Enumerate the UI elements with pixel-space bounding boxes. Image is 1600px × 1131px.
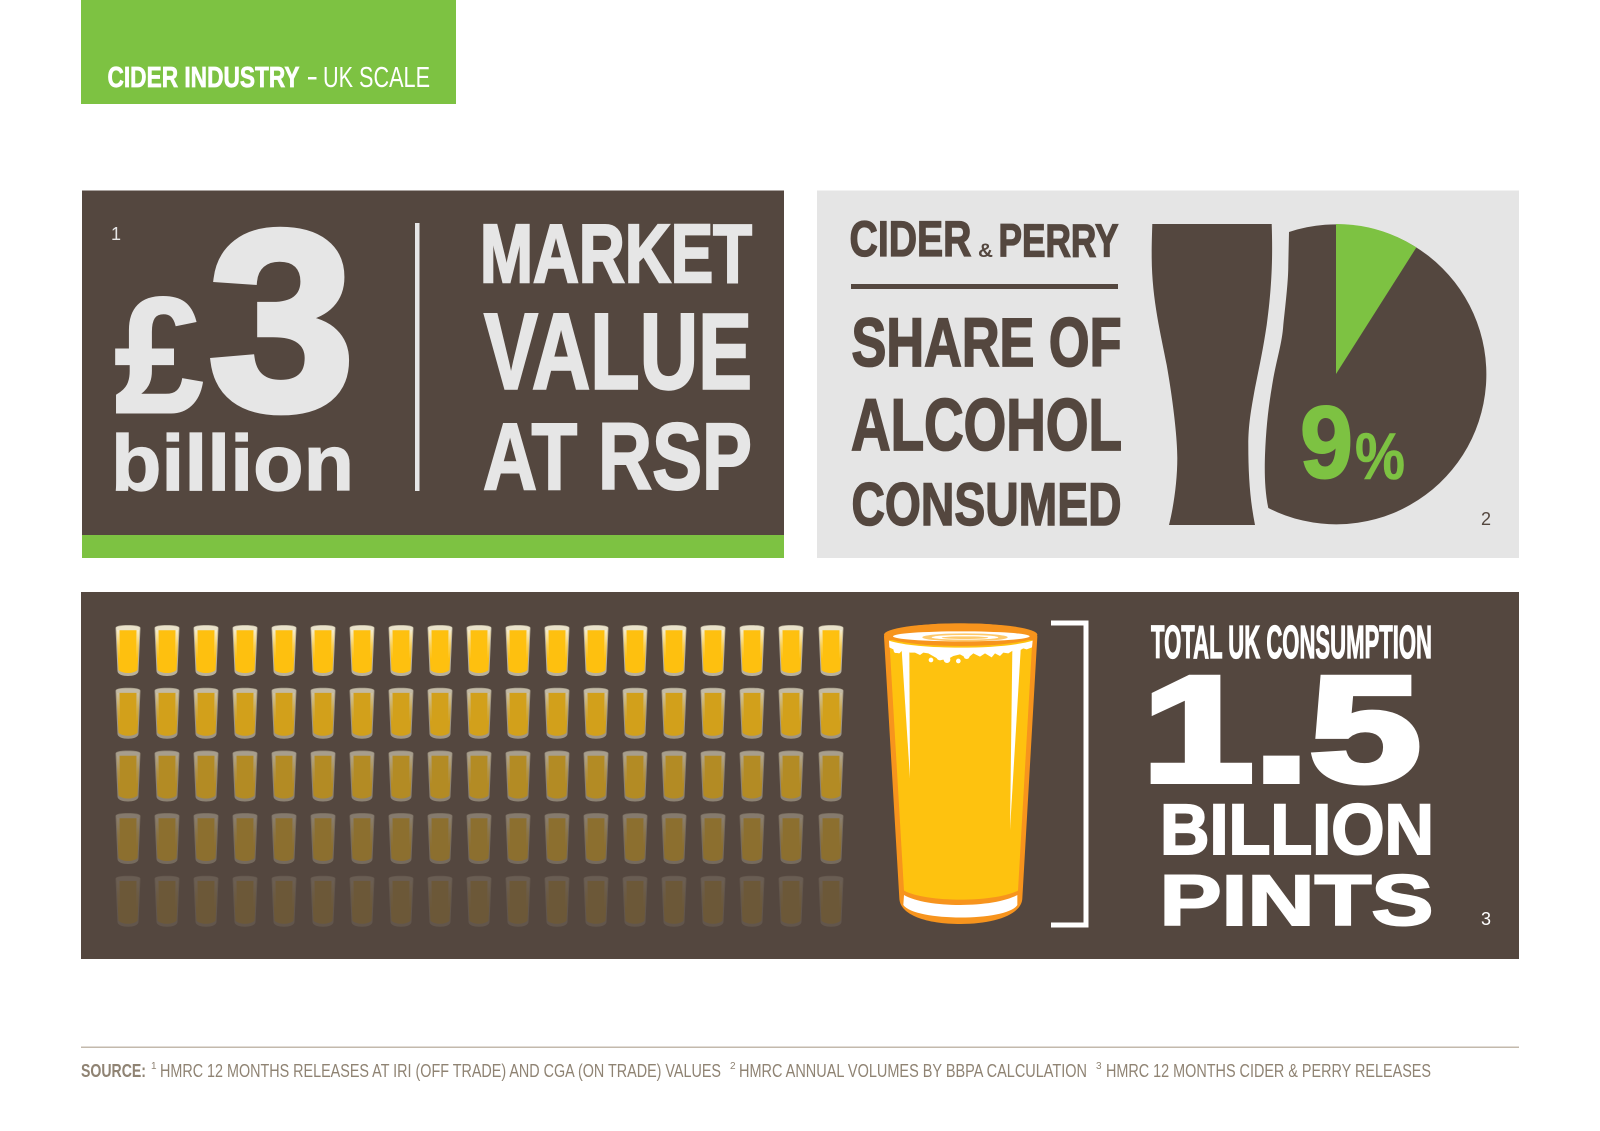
cider and perry heading: &	[978, 241, 993, 262]
share of alcohol consumed text: ALCOHOL	[851, 385, 1122, 466]
cider and perry heading: CIDER	[850, 211, 972, 267]
header title: UK SCALE	[323, 62, 430, 94]
source note	[81, 1061, 1431, 1081]
billion pints text: BILLION	[1160, 791, 1434, 870]
glass row 3	[116, 750, 844, 802]
panel: total consumption	[81, 592, 1519, 959]
header title: CIDER INDUSTRY	[108, 62, 300, 94]
share of alcohol consumed text: CONSUMED	[852, 471, 1122, 538]
glass row 5	[116, 876, 844, 927]
share of alcohol consumed text	[851, 304, 1122, 538]
bracket	[1051, 623, 1086, 925]
percentage label: 9	[1300, 386, 1353, 500]
source note: HMRC 12 MONTHS CIDER & PERRY RELEASES	[1106, 1061, 1431, 1081]
source note: HMRC 12 MONTHS RELEASES AT IRI (OFF TRADE) AND CGA (ON TRADE) VALUES	[160, 1061, 721, 1081]
source note: HMRC ANNUAL VOLUMES BY BBPA CALCULATION	[739, 1061, 1087, 1081]
market value text: MARKET	[480, 207, 752, 300]
glass row 1	[116, 625, 844, 676]
billion pints text: PINTS	[1160, 862, 1434, 941]
source divider	[81, 1046, 1519, 1048]
green footer bar	[82, 535, 784, 558]
market value text: VALUE	[484, 290, 752, 412]
market value text	[480, 207, 752, 510]
percentage label: %	[1355, 419, 1405, 493]
big number 1.5: 1.5	[1142, 645, 1421, 813]
glass row 4	[116, 813, 844, 864]
footnote marker 1: 1	[111, 224, 121, 244]
panel: market value	[82, 178, 784, 558]
share of alcohol consumed text: SHARE OF	[852, 304, 1122, 381]
billion pints text	[1160, 791, 1434, 941]
header tab	[81, 0, 456, 104]
billion label: billion	[111, 418, 354, 507]
vertical divider	[415, 223, 420, 491]
source note: 2	[730, 1061, 736, 1072]
green wedge	[1336, 224, 1416, 374]
glass row 2	[116, 688, 844, 739]
cider and perry heading: PERRY	[998, 214, 1118, 266]
source note: SOURCE:	[81, 1061, 146, 1081]
pie chart: 9 percent	[1265, 224, 1486, 524]
pound sign: £	[115, 264, 203, 447]
source note: 1	[151, 1061, 157, 1072]
footnote marker 3: 3	[1481, 909, 1491, 929]
footnote marker 2: 2	[1481, 509, 1491, 529]
heading rule	[851, 284, 1118, 289]
big number 3: 3	[208, 178, 355, 464]
pictogram grid of small pint glasses	[116, 625, 844, 927]
percentage label	[1300, 386, 1405, 500]
panel: share of alcohol	[817, 190, 1519, 558]
icon: pint glass silhouette	[1152, 224, 1272, 525]
market value text: AT RSP	[483, 404, 752, 510]
cider and perry heading	[850, 211, 1118, 267]
source note: 3	[1096, 1061, 1102, 1072]
icon: large pint of cider	[884, 623, 1037, 924]
